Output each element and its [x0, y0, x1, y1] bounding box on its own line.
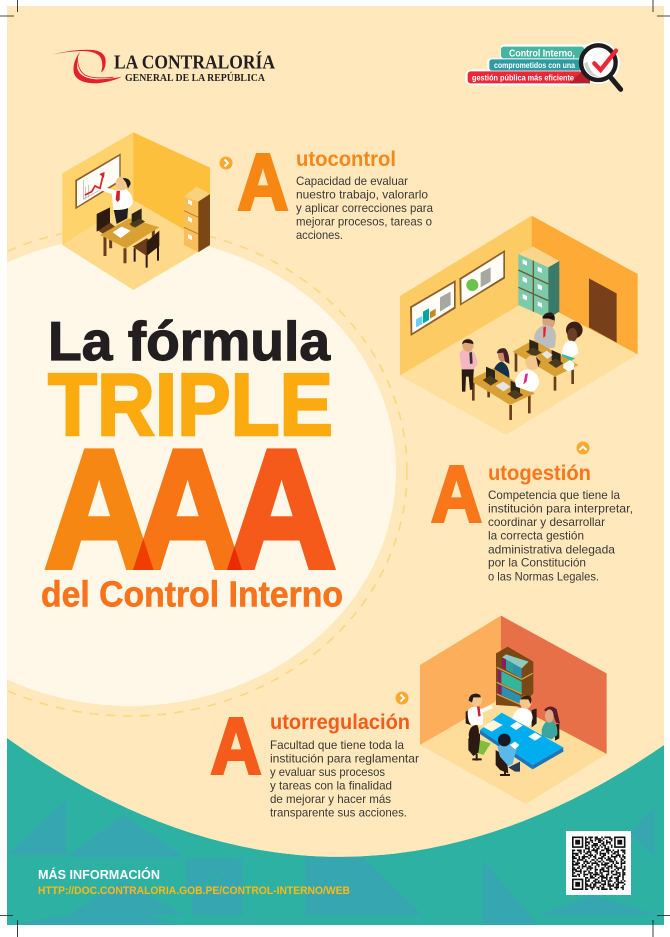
section: Autogestión: administrativa delegada	[488, 542, 615, 556]
footer: more information	[38, 867, 350, 897]
section: Autocontrol: mejorar procesos, tareas o	[296, 214, 432, 228]
section: Autocontrol	[238, 137, 433, 242]
badge: Control Interno: Control Interno,	[509, 48, 575, 60]
section: Autorregulación	[210, 701, 419, 820]
title block: TRIPLE	[48, 355, 333, 454]
dashed ring	[0, 226, 407, 716]
section: Autocontrol: acciones.	[296, 228, 343, 242]
title block	[41, 310, 343, 614]
icon: arrow bullet right	[220, 156, 232, 170]
badge: Control Interno: comprometidos con una	[494, 60, 575, 70]
teal footer band	[7, 700, 664, 925]
light central circle	[0, 236, 396, 706]
section: Autogestión	[431, 449, 633, 583]
section: Autogestión: institución para interpretar,	[488, 502, 633, 516]
QR code	[566, 831, 631, 895]
title block: A	[44, 415, 154, 603]
illustration: room 2, office team	[400, 216, 638, 435]
section: Autogestión: la correcta gestión	[488, 529, 584, 543]
section: Autocontrol: A	[238, 137, 289, 226]
section: Autorregulación: Facultad que tiene toda la	[270, 738, 404, 752]
section: Autorregulación: A	[210, 701, 262, 790]
logo: La Contraloría	[53, 50, 275, 84]
logo: La Contraloría: LA CONTRALORÍA	[114, 50, 275, 74]
icon: arrow bullet up	[576, 442, 590, 454]
section: Autogestión: Competencia que tiene la	[488, 488, 620, 502]
section: Autocontrol: y aplicar correcciones para	[296, 201, 433, 215]
section: Autogestión: o las Normas Legales.	[488, 569, 599, 583]
section: Autogestión: coordinar y desarrollar	[488, 515, 605, 529]
icon: arrow bullet right	[396, 692, 408, 704]
section: Autorregulación: y evaluar sus procesos	[270, 765, 385, 779]
title block: A	[227, 415, 336, 603]
badge: Control Interno: gestión pública más eficiente	[472, 72, 574, 82]
section: Autocontrol: utocontrol	[296, 148, 396, 171]
logo: La Contraloría: GENERAL DE LA REPÚBLICA	[125, 72, 265, 84]
section: Autogestión: por la Constitución	[488, 556, 586, 570]
title block: La fórmula	[48, 310, 330, 372]
title block: A	[133, 415, 242, 603]
section: Autorregulación: de mejorar y hacer más	[270, 792, 391, 806]
footer: more information: MÁS INFORMACIÓN	[38, 867, 160, 882]
section: Autocontrol: nuestro trabajo, valorarlo	[296, 188, 428, 202]
illustration: room 1, presenter	[62, 132, 210, 290]
section: Autorregulación: transparente sus acciones.	[270, 806, 407, 820]
section: Autorregulación: institución para reglamentar	[270, 752, 419, 766]
illustration: room 3, meeting	[420, 616, 607, 804]
section: Autogestión: A	[431, 449, 482, 538]
badge: Control Interno	[465, 41, 621, 89]
footer: more information: HTTP://DOC.CONTRALORIA.GOB.PE/CONTROL-INTERNO/WEB	[38, 885, 350, 897]
section: Autorregulación: utorregulación	[270, 711, 410, 734]
title block: del Control Interno	[41, 574, 343, 614]
section: Autocontrol: Capacidad de evaluar	[296, 174, 408, 188]
section: Autorregulación: y tareas con la finalidad	[270, 779, 392, 793]
section: Autogestión: utogestión	[488, 462, 591, 485]
